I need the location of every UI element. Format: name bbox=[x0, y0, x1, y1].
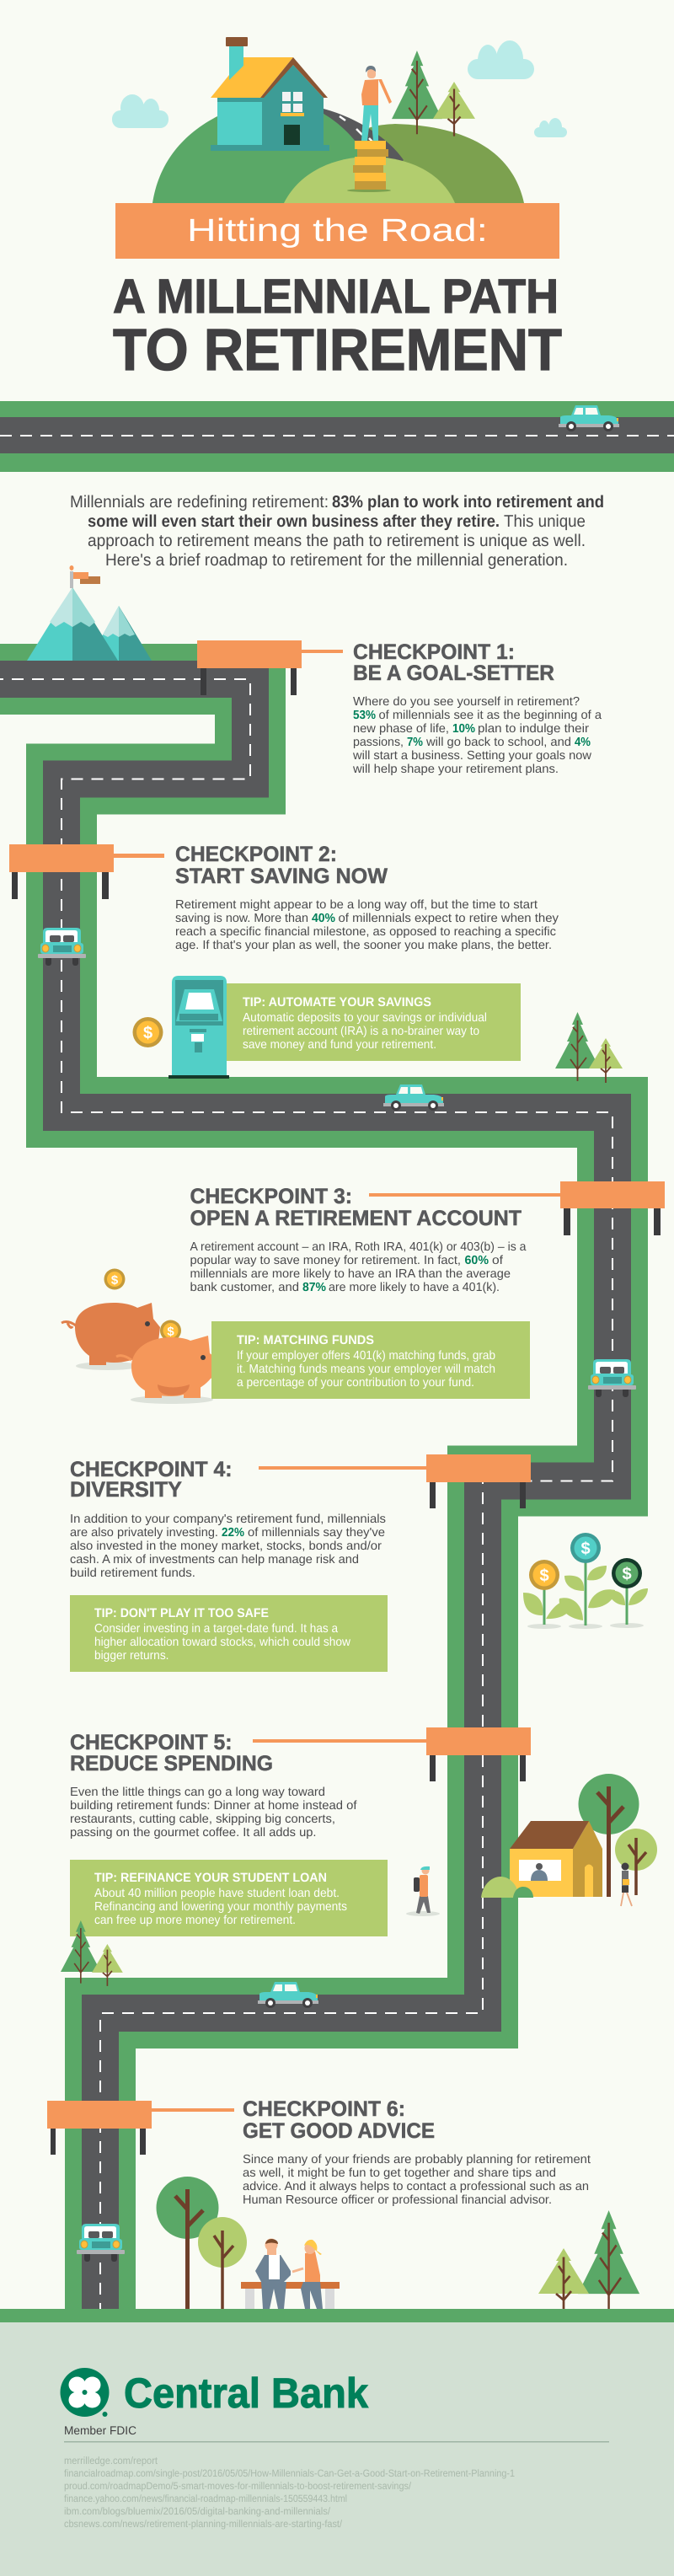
main title: A MILLENNIAL PATH bbox=[113, 270, 559, 324]
checkpoint 6 text: Since many of your friends are probably planning for retirement bbox=[243, 2153, 591, 2166]
icon: pine trees right bbox=[538, 2210, 639, 2316]
woman bbox=[292, 2240, 323, 2309]
checkpoint 1 heading bbox=[353, 640, 554, 685]
checkpoint 6 text: as well, it might be fun to get together and share tips and bbox=[243, 2166, 556, 2180]
front hill bbox=[284, 157, 455, 203]
tip: automate your savings: retirement account (IRA) is a no-brainer way to bbox=[243, 1025, 479, 1038]
checkpoint 1 text: will help shape your retirement plans. bbox=[352, 763, 559, 776]
checkpoint 4 text: cash. A mix of investments can help manage risk and bbox=[70, 1553, 359, 1566]
source list bbox=[64, 2455, 515, 2530]
checkpoint 4 text: of millennials say they've bbox=[248, 1526, 385, 1540]
tip: refinance your student loan: Refinancing and lowering your monthly payments bbox=[94, 1900, 347, 1914]
tree behind house hill bbox=[392, 51, 442, 134]
checkpoint 3 text: A retirement account – an IRA, Roth IRA, 401(k) or 403(b) – is a bbox=[190, 1240, 527, 1254]
man bbox=[255, 2238, 291, 2309]
intro paragraph: This unique bbox=[504, 512, 586, 531]
checkpoint 6 text: Human Resource officer or professional financial advisor. bbox=[243, 2193, 552, 2207]
checkpoint 1 text: passions, bbox=[353, 736, 404, 749]
icon: trees bbox=[555, 1012, 623, 1083]
checkpoint 4 heading: DIVERSITY bbox=[70, 1478, 182, 1502]
icon: coin above pig: $ bbox=[111, 1273, 119, 1288]
checkpoint 1 text: plan to indulge their bbox=[478, 722, 589, 736]
man standing on coins bbox=[361, 66, 392, 141]
house bbox=[211, 37, 329, 151]
main title: TO RETIREMENT bbox=[113, 317, 562, 383]
checkpoint 3 text: 60% bbox=[465, 1254, 489, 1267]
tip: matching funds: If your employer offers 401(k) matching funds, grab bbox=[237, 1349, 495, 1363]
icon: coffee shop bbox=[481, 1821, 602, 1898]
checkpoint 3 text: are more likely to have a 401(k). bbox=[329, 1281, 500, 1294]
icon: trees behind shop bbox=[578, 1774, 657, 1897]
icon: dollar coin: $ bbox=[143, 1024, 152, 1042]
checkpoint 5 text: building retirement funds: Dinner at home instead of bbox=[70, 1799, 357, 1813]
checkpoint 5 heading bbox=[70, 1731, 273, 1775]
checkpoint 6 text bbox=[243, 2153, 591, 2207]
top road band bbox=[0, 401, 674, 472]
winding road bbox=[324, 109, 404, 173]
checkpoint 4 text bbox=[70, 1513, 386, 1580]
checkpoint 2 text: 40% bbox=[312, 912, 335, 925]
checkpoint 5 heading: CHECKPOINT 5: bbox=[70, 1731, 233, 1754]
icon: dollar coin bbox=[133, 1017, 163, 1047]
checkpoint 1 text: of millennials see it as the beginning of a bbox=[379, 709, 602, 722]
winding road bbox=[0, 679, 612, 2313]
tip: don't play it too safe: TIP: DON'T PLAY IT TOO SAFE bbox=[94, 1606, 269, 1620]
checkpoint 2 heading bbox=[175, 843, 388, 888]
coin stack bbox=[347, 141, 391, 192]
tip: automate your savings: TIP: AUTOMATE YOUR SAVINGS bbox=[243, 995, 431, 1010]
checkpoint 1 text bbox=[352, 695, 602, 776]
small tree on hill bbox=[433, 82, 475, 137]
tip: refinance your student loan: About 40 million people have student loan debt. bbox=[94, 1887, 340, 1900]
cloud left bbox=[112, 94, 168, 128]
checkpoint 5 heading: REDUCE SPENDING bbox=[70, 1752, 273, 1775]
checkpoint 1 sign bbox=[197, 640, 343, 695]
checkpoint 2 heading: CHECKPOINT 2: bbox=[175, 843, 337, 866]
icon: money plants: $ bbox=[539, 1566, 549, 1585]
checkpoint 3 heading bbox=[190, 1185, 522, 1230]
checkpoint 4 text: build retirement funds. bbox=[70, 1566, 195, 1580]
cloud right bbox=[468, 40, 534, 79]
intro paragraph: 83% plan to work into retirement and bbox=[332, 493, 604, 511]
checkpoint 1 text: 53% bbox=[353, 709, 376, 722]
tip: don't play it too safe bbox=[70, 1595, 388, 1672]
tip: automate your savings: save money and fund your retirement. bbox=[243, 1038, 436, 1052]
checkpoint 1 text: 10% bbox=[452, 722, 475, 736]
intro paragraph bbox=[70, 493, 604, 570]
checkpoint 6 heading bbox=[243, 2097, 435, 2143]
footer panel bbox=[0, 2322, 674, 2576]
checkpoint 2 sign bbox=[9, 844, 164, 899]
icon: money plants: $ bbox=[580, 1540, 591, 1558]
intro paragraph: approach to retirement means the path to retirement is unique as well. bbox=[88, 532, 586, 550]
main title bbox=[113, 270, 562, 383]
checkpoint 5 sign bbox=[253, 1727, 531, 1781]
ground band bbox=[0, 2309, 674, 2322]
tip: automate your savings bbox=[227, 983, 521, 1061]
checkpoint 3 heading: CHECKPOINT 3: bbox=[190, 1185, 352, 1208]
source list: merrilledge.com/report bbox=[64, 2455, 158, 2466]
checkpoint 2 text: of millennials expect to retire when they bbox=[339, 912, 559, 925]
tip: don't play it too safe: bigger returns. bbox=[94, 1649, 168, 1663]
tip: matching funds: a percentage of your contribution to your fund. bbox=[237, 1376, 474, 1390]
tip: don't play it too safe: Consider investing in a target-date fund. It has a bbox=[94, 1622, 339, 1636]
checkpoint 3 text: popular way to save money for retirement. In fact, bbox=[190, 1254, 461, 1267]
intro paragraph: some will even start their own business after they retire. bbox=[88, 512, 500, 531]
checkpoint 4 text: also invested in the money market, stocks, bonds and/or bbox=[70, 1540, 382, 1553]
checkpoint 5 text: Even the little things can go a long way toward bbox=[70, 1786, 325, 1799]
checkpoint 1 text: will go back to school, and bbox=[425, 736, 571, 749]
icon: money plants bbox=[523, 1533, 648, 1629]
icon: back piggy bank bbox=[62, 1303, 160, 1370]
checkpoint 2 text: age. If that's your plan as well, the sooner you make plans, the better. bbox=[175, 939, 552, 952]
car heading down the road bbox=[38, 928, 86, 966]
checkpoint 1 heading: BE A GOAL-SETTER bbox=[353, 661, 554, 685]
title banner bbox=[115, 203, 559, 259]
checkpoint 3 text: of bbox=[492, 1254, 504, 1267]
checkpoint 6 heading: GET GOOD ADVICE bbox=[243, 2119, 435, 2143]
checkpoint 3 text: bank customer, and bbox=[190, 1281, 299, 1294]
checkpoint 1 text: will start a business. Setting your goals now bbox=[352, 749, 592, 763]
checkpoint 1 heading: CHECKPOINT 1: bbox=[353, 640, 515, 664]
icon: coin above pig bbox=[104, 1269, 125, 1289]
checkpoint 2 text bbox=[175, 898, 559, 952]
icon: coin entering pig: $ bbox=[167, 1325, 174, 1339]
car on right road bbox=[588, 1359, 636, 1397]
intro paragraph: Millennials are redefining retirement: bbox=[70, 493, 329, 511]
tip: don't play it too safe: higher allocation toward stocks, which could show bbox=[94, 1636, 350, 1649]
checkpoint 2 text: Retirement might appear to be a long way off, but the time to start bbox=[175, 898, 538, 912]
icon: woman with bag bbox=[621, 1862, 632, 1906]
car on lower road bbox=[258, 1982, 318, 2008]
checkpoint 4 text: 22% bbox=[222, 1526, 244, 1540]
icon: coin entering pig bbox=[160, 1320, 181, 1342]
checkpoint 4 text: In addition to your company's retirement fund, millennials bbox=[70, 1513, 386, 1526]
logo: Central Bank bbox=[124, 2370, 368, 2417]
cloud small bbox=[534, 118, 567, 137]
tip: automate your savings: Automatic deposits to your savings or individual bbox=[243, 1011, 487, 1025]
icon: ATM bbox=[168, 976, 229, 1079]
source list: cbsnews.com/news/retirement-planning-millennials-are-starting-fast/ bbox=[64, 2518, 343, 2530]
checkpoint 2 text: reach a specific financial milestone, as opposed to reaching a specific bbox=[175, 925, 556, 939]
checkpoint 4 heading bbox=[70, 1458, 233, 1502]
right hill bbox=[362, 124, 524, 203]
tip: refinance your student loan: TIP: REFINANCE YOUR STUDENT LOAN bbox=[94, 1871, 327, 1885]
source list: financialroadmap.com/single-post/2016/05/05/How-Millennials-Can-Get-a-Good-Start-on-Retirement-Planning-1 bbox=[64, 2467, 515, 2479]
checkpoint 6 heading: CHECKPOINT 6: bbox=[243, 2097, 405, 2121]
icon: money plants: $ bbox=[622, 1565, 632, 1583]
checkpoint 4 text: are also privately investing. bbox=[70, 1526, 218, 1540]
source list: finance.yahoo.com/news/financial-roadmap-millennials-150559443.html bbox=[64, 2493, 347, 2504]
icon: walking student bbox=[406, 1866, 440, 1916]
checkpoint 5 text bbox=[70, 1786, 357, 1840]
checkpoint 2 heading: START SAVING NOW bbox=[175, 865, 388, 888]
car near finish bbox=[77, 2224, 125, 2262]
checkpoint 3 sign bbox=[369, 1181, 665, 1235]
checkpoint 4 sign bbox=[259, 1454, 531, 1508]
car on second road bbox=[383, 1084, 444, 1111]
checkpoint 3 text: 87% bbox=[302, 1281, 326, 1294]
checkpoint 1 text: Where do you see yourself in retirement? bbox=[353, 695, 580, 709]
checkpoint 3 heading: OPEN A RETIREMENT ACCOUNT bbox=[190, 1207, 522, 1230]
icon: couple on bench bbox=[241, 2238, 340, 2309]
tip: matching funds: it. Matching funds means your employer will match bbox=[237, 1363, 495, 1376]
checkpoint 2 text: saving is now. More than bbox=[175, 912, 308, 925]
left hill bbox=[152, 114, 388, 203]
checkpoint 5 text: passing on the gourmet coffee. It all adds up. bbox=[70, 1826, 316, 1840]
tip: refinance your student loan: can free up more money for retirement. bbox=[94, 1914, 296, 1927]
icon: mountains with flag bbox=[27, 565, 152, 661]
hero illustration: house on hills bbox=[112, 37, 567, 203]
checkpoint 3 text bbox=[190, 1240, 527, 1294]
intro paragraph: Here's a brief roadmap to retirement for the millennial generation. bbox=[105, 551, 568, 570]
subtitle: Hitting the Road: bbox=[187, 213, 488, 249]
car on top road bbox=[559, 405, 619, 431]
tip: refinance your student loan bbox=[70, 1860, 388, 1936]
checkpoint 1 text: 7% bbox=[407, 736, 423, 749]
checkpoint 5 text: restaurants, cutting cable, skipping big concerts, bbox=[70, 1813, 335, 1826]
member FDIC: Member FDIC bbox=[64, 2423, 136, 2437]
icon: pine trees bbox=[61, 1920, 123, 1986]
checkpoint 3 text: millennials are more likely to have an IRA than the average bbox=[190, 1267, 511, 1281]
icon: round trees bbox=[157, 2177, 247, 2309]
source list: proud.com/roadmapDemo/5-smart-moves-for-millennials-to-boost-retirement-savings/ bbox=[64, 2480, 412, 2492]
checkpoint 6 sign bbox=[47, 2101, 234, 2155]
tip: matching funds: TIP: MATCHING FUNDS bbox=[237, 1333, 374, 1347]
checkpoint 6 text: advice. And it always helps to contact a professional such as an bbox=[243, 2180, 589, 2193]
checkpoint 1 text: 4% bbox=[575, 736, 591, 749]
icon: front piggy bank bbox=[116, 1336, 217, 1404]
checkpoint 4 heading: CHECKPOINT 4: bbox=[70, 1458, 233, 1481]
tip: matching funds bbox=[211, 1321, 530, 1399]
source list: ibm.com/blogs/bluemix/2016/05/digital-banking-and-millennials/ bbox=[64, 2505, 331, 2517]
checkpoint 1 text: new phase of life, bbox=[353, 722, 449, 736]
